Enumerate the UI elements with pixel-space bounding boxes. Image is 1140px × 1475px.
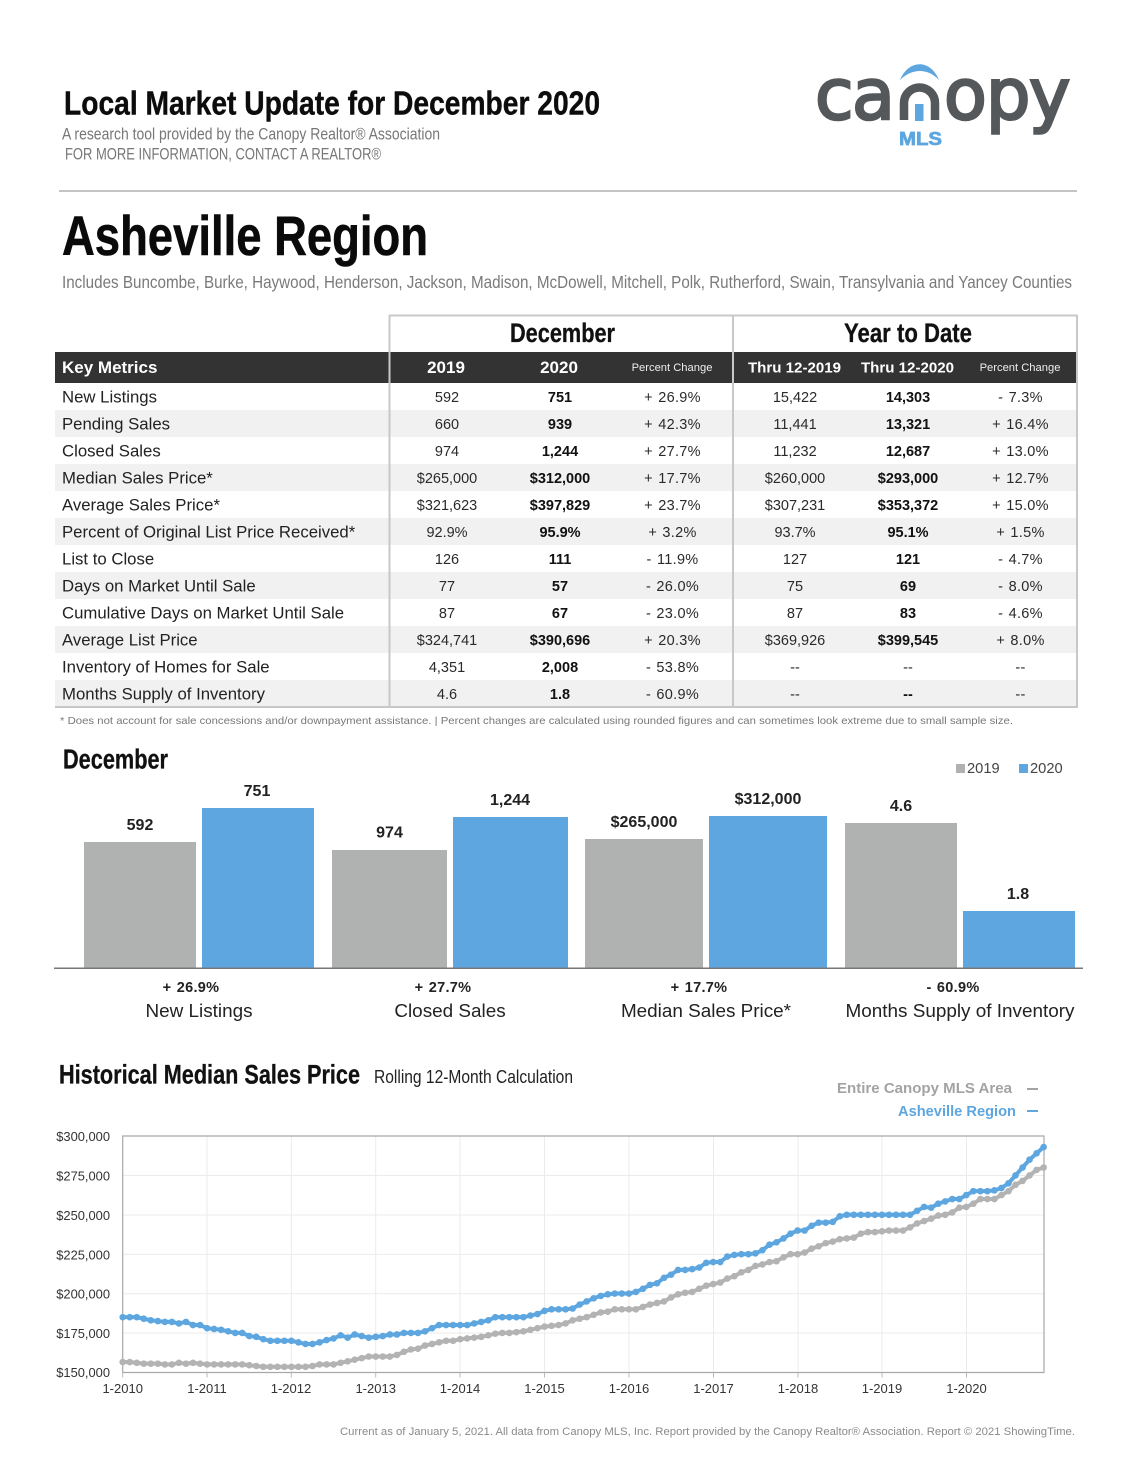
bars: Median Sales Price: + 17.7%: [671, 980, 727, 996]
row: Cumulative Days on Market Until Sale: 83: [900, 606, 916, 622]
legend: line chart series: Asheville Region: [898, 1104, 1016, 1120]
header: report title and source: [62, 86, 600, 164]
row: New Listings: + 26.9%: [644, 390, 701, 406]
row: Days on Market Until Sale: 77: [439, 579, 455, 595]
bars: New Listings: 592: [127, 817, 153, 834]
row: Average Sales Price: $397,829: [530, 498, 590, 514]
row: Months Supply of Inventory: Months Supply of Inventory: [62, 684, 266, 704]
row: Average List Price: Average List Price: [62, 630, 198, 650]
row: Cumulative Days on Market Until Sale: Cumulative Days on Market Until Sale: [62, 604, 344, 622]
row: List to Close: 111: [549, 552, 571, 568]
heading: December bar chart: December: [63, 744, 168, 774]
row: Median Sales Price: [62, 468, 1049, 488]
heading: Asheville Region: Asheville Region: [62, 204, 428, 267]
axis: x labels: 1-2011: [187, 1381, 227, 1396]
bars: Median Sales Price: Median Sales Price*: [621, 1001, 792, 1022]
icon: canopy dome: [900, 64, 939, 80]
row: Days on Market Until Sale: 57: [552, 579, 568, 595]
row: Percent of Original List Price Received: 95.9%: [539, 525, 581, 541]
row: List to Close: 127: [783, 552, 807, 568]
row: Pending Sales: 939: [548, 417, 572, 433]
row: New Listings: 751: [548, 390, 572, 406]
row: Days on Market Until Sale: 69: [900, 579, 916, 595]
bars: Median Sales Price: [585, 791, 827, 1022]
row: Pending Sales: 660: [435, 417, 459, 433]
row: Percent of Original List Price Received: + 3.2%: [648, 525, 697, 541]
row: Pending Sales: 13,321: [886, 417, 930, 433]
axis: y labels: [56, 1129, 110, 1380]
row: Pending Sales: + 42.3%: [644, 417, 701, 433]
axis: x labels: 1-2018: [778, 1381, 818, 1396]
table column headers: 2020: [540, 358, 578, 377]
heading: December group: December: [510, 318, 615, 348]
series: Asheville Region: [123, 1147, 1044, 1344]
row: Closed Sales: Closed Sales: [62, 442, 161, 460]
row: Average Sales Price: $307,231: [765, 498, 825, 514]
row: Inventory of Homes for Sale: [62, 658, 1026, 676]
row: New Listings: - 7.3%: [998, 390, 1043, 406]
title: local market update: Local Market Update for December 2020: [64, 86, 600, 122]
row: Days on Market Until Sale: - 26.0%: [646, 579, 699, 595]
row: Closed Sales: 12,687: [886, 444, 930, 460]
row: Cumulative Days on Market Until Sale: 67: [552, 606, 568, 622]
row: List to Close: 121: [896, 552, 920, 568]
axis: y labels: $250,000: [56, 1208, 110, 1223]
row: List to Close: - 4.7%: [998, 552, 1043, 568]
row: Closed Sales: + 27.7%: [644, 444, 701, 460]
table column headers: Thru 12-2020: [861, 360, 954, 376]
row: Median Sales Price: Median Sales Price*: [62, 468, 213, 488]
axis: y labels: $200,000: [56, 1286, 110, 1302]
row: Average List Price: + 20.3%: [644, 633, 701, 649]
row: Months Supply of Inventory: --: [790, 687, 800, 703]
row: Closed Sales: [62, 442, 1049, 460]
row: List to Close: - 11.9%: [646, 552, 698, 568]
row: Days on Market Until Sale: 75: [787, 579, 803, 595]
row: Months Supply of Inventory: [62, 684, 1026, 704]
row: Cumulative Days on Market Until Sale: 87: [787, 606, 803, 622]
axis: y labels: $275,000: [56, 1168, 110, 1184]
axis: y labels: $225,000: [56, 1248, 110, 1262]
bars: Months Supply of Inventory: Months Supply of Inventory: [846, 1001, 1075, 1022]
row: Median Sales Price: + 17.7%: [644, 471, 701, 487]
row: Median Sales Price: $293,000: [878, 471, 938, 487]
row: Months Supply of Inventory: - 60.9%: [646, 687, 699, 703]
table column headers: Percent Change: [632, 362, 712, 374]
row: Average Sales Price: + 23.7%: [644, 498, 701, 514]
row: Average List Price: [62, 630, 1045, 650]
bars: Median Sales Price: $312,000: [735, 791, 801, 808]
row: Average List Price: $369,926: [765, 633, 825, 649]
row: Average Sales Price: Average Sales Price*: [62, 496, 220, 514]
axis: y labels: $300,000: [56, 1129, 110, 1144]
bars: Months Supply of Inventory: [845, 798, 1075, 1022]
row: Median Sales Price: $260,000: [765, 471, 825, 487]
row: Cumulative Days on Market Until Sale: [62, 604, 1043, 622]
table column headers: 2019: [427, 358, 465, 377]
axis: x labels: 1-2017: [693, 1381, 734, 1396]
line chart: historical median sales price: [56, 1129, 1044, 1396]
row: Percent of Original List Price Received: + 1.5%: [996, 525, 1045, 541]
row: Inventory of Homes for Sale: Inventory of Homes for Sale: [62, 658, 270, 676]
row: Percent of Original List Price Received: 92.9%: [426, 525, 468, 541]
legend: line chart series: Entire Canopy MLS Area: [837, 1081, 1013, 1097]
axis: x labels: 1-2013: [355, 1381, 396, 1396]
row: Cumulative Days on Market Until Sale: - 23.0%: [646, 606, 699, 622]
row: Closed Sales: + 13.0%: [992, 444, 1049, 460]
heading: Year to Date group: Year to Date: [844, 318, 972, 348]
legend: bar chart years: 2020: [1030, 761, 1063, 777]
row: Closed Sales: 974: [435, 444, 459, 460]
row: Inventory of Homes for Sale: --: [1015, 660, 1026, 676]
bars: Closed Sales: + 27.7%: [415, 980, 471, 996]
row: Percent of Original List Price Received: [62, 522, 1045, 542]
row: Months Supply of Inventory: --: [1015, 687, 1026, 703]
bars: Months Supply of Inventory: - 60.9%: [926, 980, 980, 996]
row: Average Sales Price: [62, 496, 1049, 514]
table column headers: [62, 358, 1060, 377]
row: Months Supply of Inventory: 4.6: [437, 687, 457, 703]
row: Pending Sales: + 16.4%: [992, 417, 1049, 433]
row: Percent of Original List Price Received: 95.1%: [887, 525, 929, 541]
icon: door: [915, 104, 924, 121]
legend: line chart series: [837, 1081, 1038, 1120]
row: Months Supply of Inventory: --: [903, 687, 913, 703]
table column headers: Percent Change: [980, 362, 1060, 374]
row: Inventory of Homes for Sale: - 53.8%: [646, 660, 699, 676]
row: Average Sales Price: $321,623: [417, 498, 477, 514]
row: New Listings: 592: [435, 390, 459, 406]
heading: Historical Median Sales Price: Historical Median Sales Price: [59, 1060, 360, 1090]
icon: house arch: [904, 88, 935, 120]
row: Median Sales Price: $312,000: [530, 471, 590, 487]
row: Pending Sales: [62, 414, 1049, 434]
row: Days on Market Until Sale: - 8.0%: [998, 579, 1043, 595]
axis: x labels: 1-2016: [609, 1381, 649, 1396]
axis: y labels: $150,000: [56, 1365, 110, 1380]
text: data source footer: Current as of January 5, 2021. All data from Canopy MLS, Inc. Report provided by the Canopy Realtor® Association. Report © 2021 ShowingTime.: [340, 1426, 1075, 1438]
panel: key metrics table: [55, 315, 1078, 707]
row: New Listings: New Listings: [62, 388, 157, 406]
logo: Canopy MLS: MLS: [899, 129, 942, 149]
text: contact line: FOR MORE INFORMATION, CONTACT A REALTOR®: [65, 146, 381, 164]
row: Average Sales Price: + 15.0%: [992, 498, 1049, 514]
row: Pending Sales: 11,441: [773, 417, 817, 433]
axis: x labels: 1-2010: [102, 1381, 143, 1396]
table header bar: [55, 352, 1077, 383]
bars: New Listings: New Listings: [145, 1001, 253, 1022]
row: New Listings: 14,303: [886, 390, 930, 406]
row: Cumulative Days on Market Until Sale: 87: [439, 606, 455, 622]
axis: x labels: 1-2020: [946, 1381, 987, 1396]
table column headers: Thru 12-2019: [748, 360, 841, 376]
bars: Closed Sales: 1,244: [490, 792, 530, 809]
row: Average List Price: $399,545: [878, 633, 938, 649]
bars: Months Supply of Inventory: 4.6: [890, 798, 912, 815]
row: New Listings: 15,422: [773, 390, 817, 406]
row: New Listings: [62, 388, 1043, 406]
axis: x labels: 1-2019: [862, 1381, 902, 1396]
legend: bar chart years: [956, 761, 1063, 777]
row: Closed Sales: 1,244: [542, 444, 578, 460]
row: Months Supply of Inventory: 1.8: [550, 687, 570, 703]
row: Days on Market Until Sale: [62, 576, 1043, 596]
row: List to Close: List to Close: [62, 550, 154, 568]
table column headers: Key Metrics: [62, 358, 157, 377]
row: Average Sales Price: $353,372: [878, 498, 938, 514]
row: Average List Price: + 8.0%: [996, 633, 1045, 649]
logo: Canopy MLS: ca: [815, 54, 895, 136]
row: Days on Market Until Sale: Days on Market Until Sale: [62, 576, 256, 596]
text: research tool line: A research tool provided by the Canopy Realtor® Association: [62, 126, 440, 144]
row: Inventory of Homes for Sale: --: [790, 660, 800, 676]
row: Median Sales Price: $265,000: [417, 471, 477, 487]
axis: y labels: $175,000: [56, 1326, 110, 1341]
row: Inventory of Homes for Sale: 2,008: [542, 660, 578, 676]
logo: Canopy MLS: opy: [944, 54, 1070, 136]
row: List to Close: [62, 550, 1043, 568]
axis: x labels: [102, 1381, 987, 1396]
row: Percent of Original List Price Received: Percent of Original List Price Received*: [62, 522, 356, 542]
axis: x labels: 1-2015: [524, 1381, 565, 1396]
row: Median Sales Price: + 12.7%: [992, 471, 1049, 487]
row: List to Close: 126: [435, 552, 459, 568]
row: Cumulative Days on Market Until Sale: - 4.6%: [998, 606, 1043, 622]
row: Inventory of Homes for Sale: --: [903, 660, 913, 676]
row: Inventory of Homes for Sale: 4,351: [429, 660, 465, 676]
series: entire Canopy MLS area: [123, 1168, 1044, 1367]
bars: Months Supply of Inventory: 1.8: [1007, 886, 1029, 903]
row: Pending Sales: Pending Sales: [62, 414, 170, 434]
row: Closed Sales: 11,232: [773, 444, 817, 460]
row: Average List Price: $390,696: [530, 633, 590, 649]
bars: Closed Sales: [332, 792, 568, 1022]
bars: New Listings: [84, 783, 314, 1022]
axis: x labels: 1-2012: [271, 1381, 311, 1396]
legend: bar chart years: 2019: [967, 761, 1000, 777]
row: Percent of Original List Price Received: 93.7%: [774, 525, 816, 541]
row: Average List Price: $324,741: [417, 633, 477, 649]
text: table footnote: * Does not account for sale concessions and/or downpayment assistance. | Percent changes are calculated using rounded figures and can sometimes look extreme due to small sample size.: [60, 715, 1013, 727]
bars: Closed Sales: Closed Sales: [394, 1001, 506, 1022]
axis: x labels: 1-2014: [440, 1381, 480, 1396]
bars: New Listings: 751: [244, 783, 270, 800]
bar chart: December comparison: [54, 783, 1083, 1022]
bars: Closed Sales: 974: [376, 824, 403, 842]
logo: Canopy MLS: [815, 54, 1070, 149]
text: chart subtitle: Rolling 12-Month Calculation: [374, 1067, 573, 1087]
bars: Median Sales Price: $265,000: [611, 814, 677, 831]
bars: New Listings: + 26.9%: [163, 980, 219, 996]
